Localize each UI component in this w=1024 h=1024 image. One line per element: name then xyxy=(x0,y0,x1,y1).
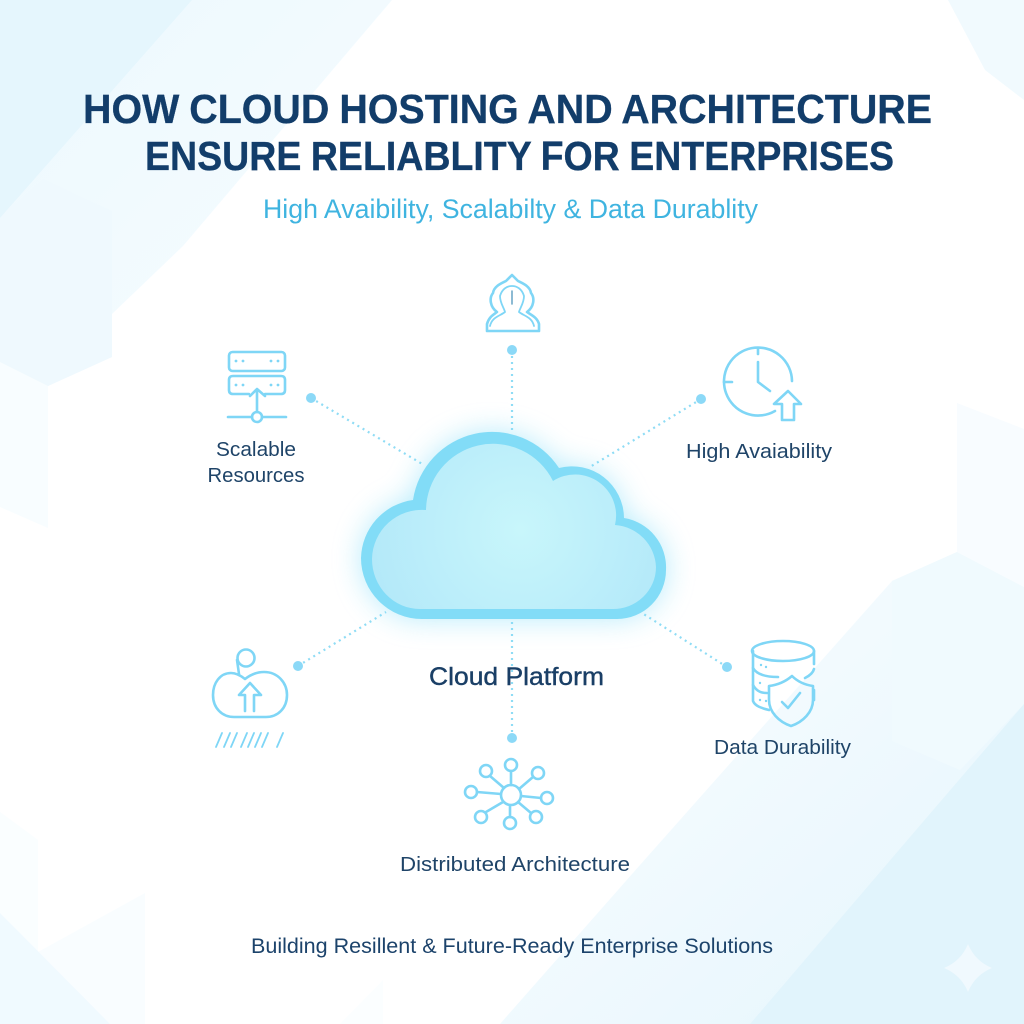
title: ENSURE RELIABLITY FOR ENTERPRISES xyxy=(145,133,894,179)
label: cloud platform: Cloud Platform xyxy=(429,663,604,691)
connectors: dotted lines and end dots xyxy=(293,345,732,743)
icon: clock with up arrow xyxy=(724,348,801,420)
icon: distributed network xyxy=(465,759,553,829)
label: distributed architecture: Distributed Architecture xyxy=(400,853,630,876)
icon: database with shield xyxy=(752,641,814,726)
label: high availability: High Avaiability xyxy=(686,440,833,463)
icon: cloud upload with rain xyxy=(213,650,287,747)
label: data durability: Data Durability xyxy=(714,736,852,759)
label: scalable resources xyxy=(208,438,304,487)
label: scalable resources: Scalable xyxy=(216,438,296,461)
central cloud xyxy=(361,432,666,619)
title: HOW CLOUD HOSTING AND ARCHITECTURE xyxy=(83,86,932,132)
icon: scalable servers xyxy=(228,352,286,422)
subtitle: High Avaibility, Scalabilty & Data Durablity xyxy=(263,194,758,224)
label: scalable resources: Resources xyxy=(208,464,304,487)
title xyxy=(83,86,932,179)
icon: corner sparkle xyxy=(944,944,992,992)
icon: person xyxy=(487,275,539,331)
footer tagline: Building Resillent & Future-Ready Enterprise Solutions xyxy=(251,934,773,958)
